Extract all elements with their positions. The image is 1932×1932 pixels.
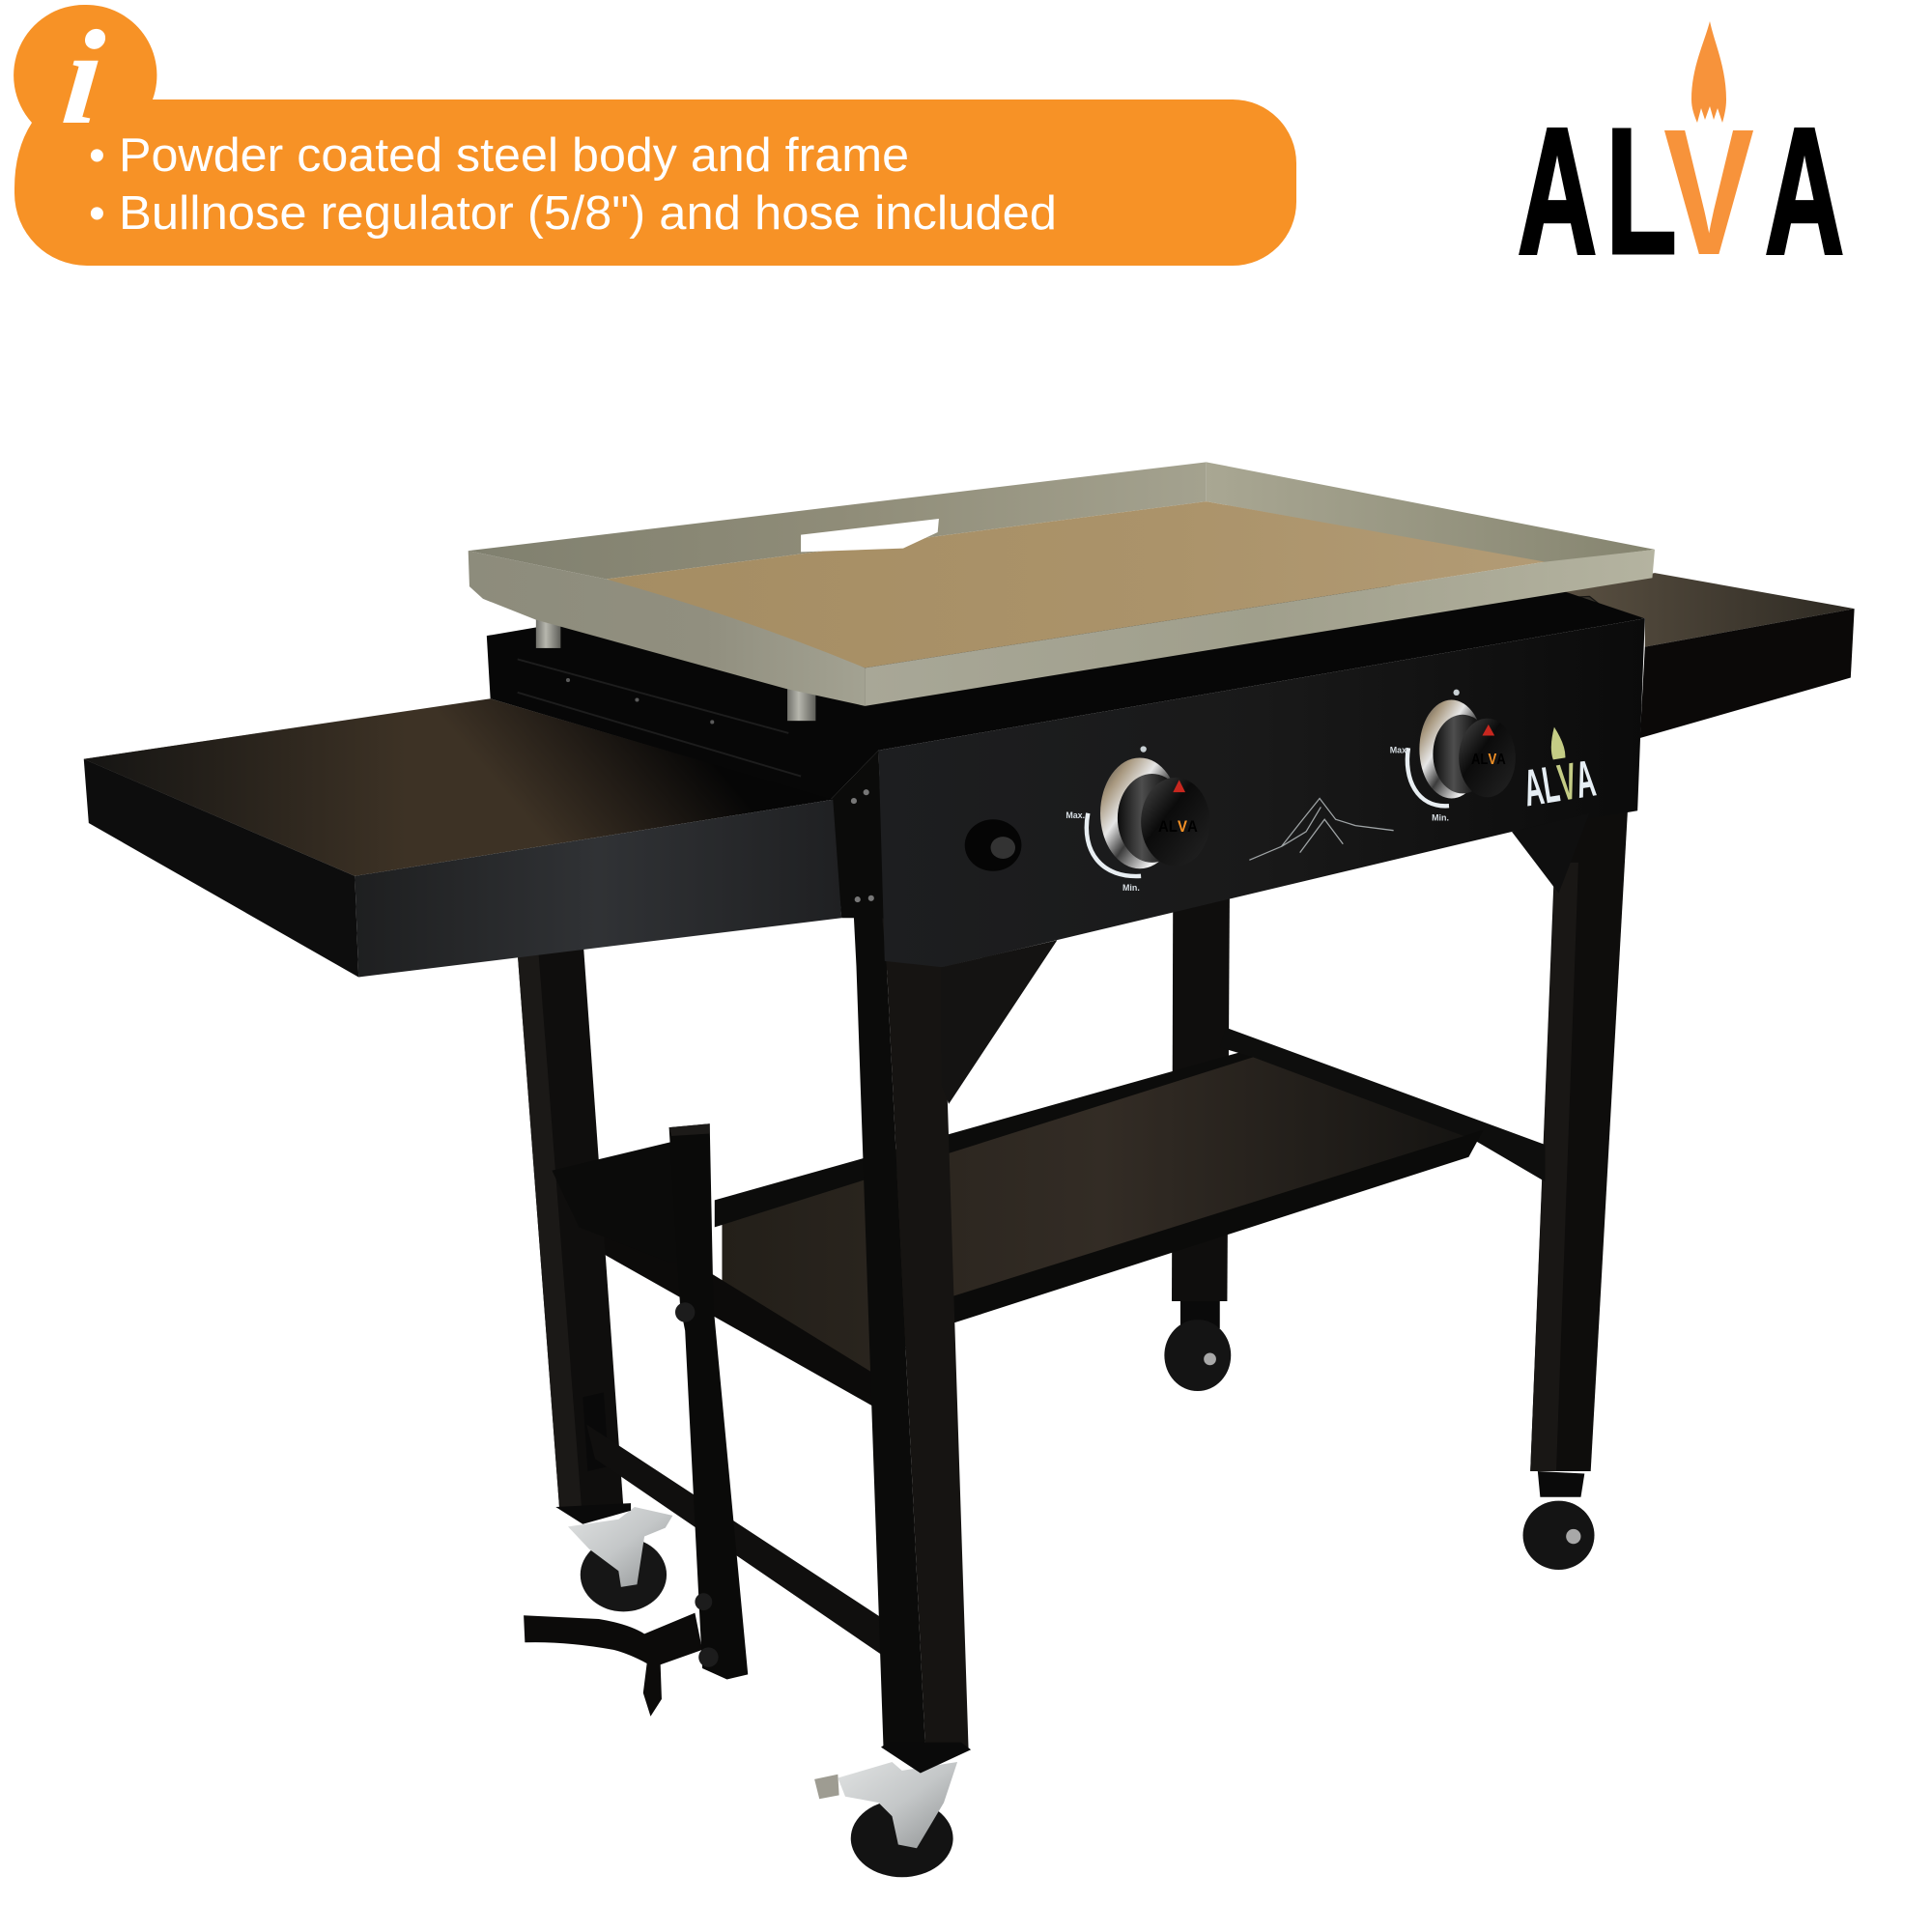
leg [1530, 788, 1629, 1471]
pointer [1173, 780, 1185, 792]
brand logo [1518, 21, 1844, 293]
min label: Min. [1122, 883, 1140, 893]
shelf top [1545, 573, 1855, 647]
front centre leg [831, 751, 969, 1748]
banner pill shape [14, 5, 1296, 266]
front left leg [516, 936, 623, 1508]
mount plate [555, 1503, 631, 1524]
griddle top [469, 462, 1655, 706]
wheel [851, 1800, 953, 1877]
logo wordmark: A [1518, 92, 1597, 292]
info banner [14, 3, 1296, 266]
logo wordmark [1518, 92, 1844, 293]
shelf left face [84, 759, 358, 977]
leg bracket [582, 1392, 609, 1471]
logo flame [1691, 21, 1726, 123]
front rail [945, 1130, 1484, 1324]
rear right leg and wheel [1523, 788, 1629, 1570]
left rail [552, 1176, 872, 1406]
left side shelf [84, 698, 841, 977]
back rail [715, 1048, 1253, 1227]
front left caster [555, 1503, 672, 1611]
knob logo: ALVA [1471, 752, 1506, 768]
shelf front [1640, 609, 1855, 738]
mount plate [881, 1743, 971, 1773]
brake lever tip [814, 1775, 839, 1799]
logo wordmark: L [1605, 92, 1677, 292]
text: line one: Powder coated steel body and frame [119, 129, 909, 182]
front left wall [469, 551, 865, 706]
dial scale arc [1407, 748, 1449, 806]
knob barrel [1118, 774, 1186, 863]
shelf top [84, 698, 833, 876]
foot pedal hook [524, 1613, 702, 1717]
position dot [1453, 690, 1460, 696]
text: line two: Bullnose regulator (5/8") and hose included [119, 187, 1057, 240]
chrome bezel [1100, 757, 1179, 868]
max label: Max. [1390, 745, 1409, 754]
griddle cart product illustration [84, 462, 1855, 1877]
corner gusset left [941, 940, 1057, 1104]
bullet: line one: • [89, 130, 105, 182]
position dot [1140, 746, 1147, 753]
front centre caster [814, 1743, 971, 1877]
knob face [1141, 778, 1210, 867]
panel logo flame [1548, 726, 1566, 759]
burner knob left [1065, 746, 1210, 893]
rear left leg and wheel [1164, 887, 1231, 1391]
bullet: line two: • [89, 188, 105, 240]
knob face [1459, 719, 1516, 797]
cooking surface [607, 501, 1545, 668]
bracket block [552, 1141, 678, 1262]
hinge plate [1545, 596, 1619, 622]
igniter button [965, 819, 1021, 871]
dial scale arc [1087, 813, 1141, 876]
panel logo text: ALVA [1520, 751, 1600, 817]
right side shelf [1545, 573, 1855, 738]
knob logo: ALVA [1158, 817, 1198, 836]
grease notch [801, 519, 939, 552]
inner right wall [1207, 462, 1655, 563]
icon: info i: i [56, 3, 110, 153]
corner gusset right [1512, 813, 1589, 894]
knob barrel [1433, 715, 1492, 793]
min label: Min. [1432, 812, 1449, 822]
lower storage shelf [552, 1028, 1545, 1406]
lower cross bar [586, 1424, 884, 1656]
max label: Max. [1065, 810, 1085, 820]
wheel [581, 1538, 667, 1611]
panel logo [1516, 722, 1600, 817]
right rail [1220, 1028, 1545, 1181]
griddle firebox body [487, 579, 1645, 800]
wheel [1523, 1501, 1595, 1570]
pointer [1482, 724, 1494, 735]
fork [568, 1507, 672, 1587]
shelf floor [722, 1048, 1484, 1378]
tool hanger bar [669, 1123, 748, 1680]
logo wordmark: A [1765, 92, 1844, 292]
inner back wall [469, 462, 1207, 579]
front right wall [865, 550, 1655, 706]
burner knob right [1390, 690, 1516, 822]
chrome bezel [1419, 699, 1484, 799]
front control panel [878, 618, 1645, 967]
mountain graphic [1249, 799, 1394, 860]
griddle support posts [536, 616, 815, 721]
shelf front face [355, 800, 841, 977]
logo wordmark: V [1663, 93, 1754, 293]
chrome fork [838, 1762, 957, 1848]
